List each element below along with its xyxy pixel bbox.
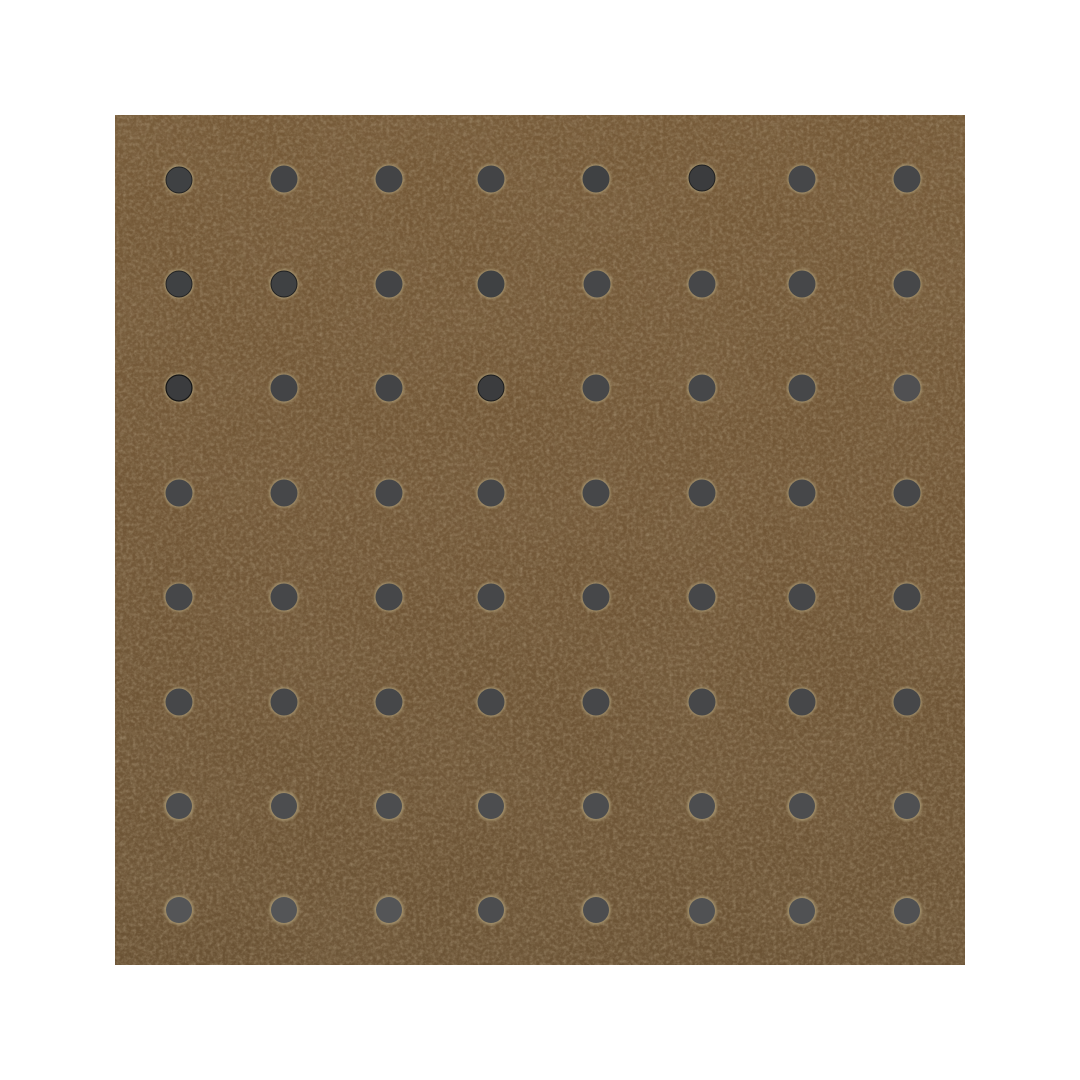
peg hole rims bbox=[164, 163, 922, 926]
board background bbox=[115, 115, 965, 965]
peg holes grid bbox=[166, 165, 920, 924]
